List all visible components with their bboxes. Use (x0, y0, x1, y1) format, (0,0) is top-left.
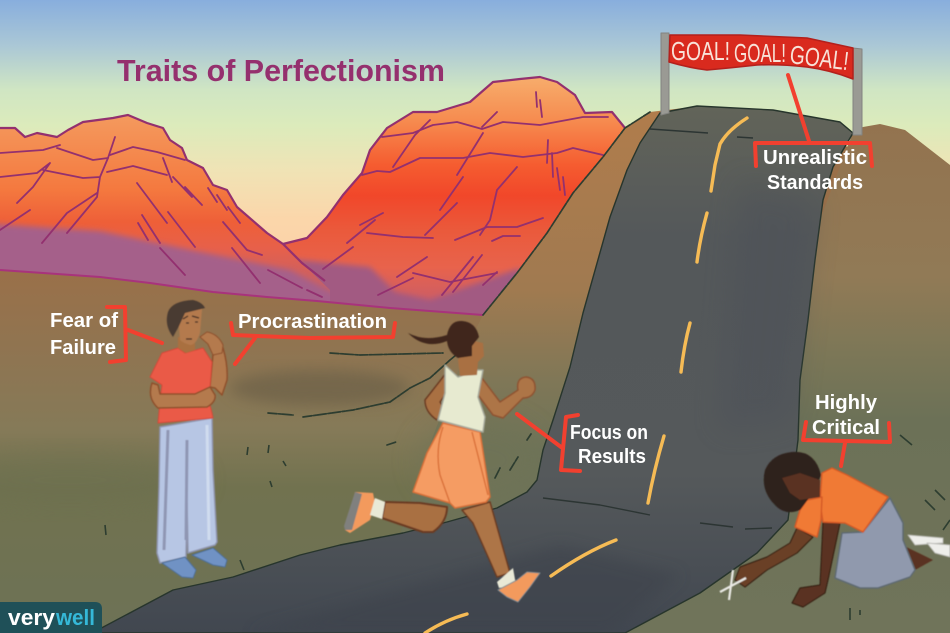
banner text: GOAL! (671, 36, 730, 66)
trousers (835, 498, 915, 588)
trousers (157, 418, 217, 563)
back arm (425, 372, 452, 420)
banner posts (661, 33, 669, 115)
front leg (462, 502, 510, 577)
scissors (720, 570, 746, 600)
head and hair (764, 452, 821, 512)
back arm (792, 522, 840, 607)
ground shadow patches (0, 370, 540, 506)
crouching woman (720, 452, 950, 607)
road cracks (543, 129, 772, 529)
label: fear of failure: Failure (50, 337, 116, 359)
back leg and feet (898, 543, 933, 570)
label: highly critical: Critical (812, 417, 880, 439)
right hill (600, 124, 950, 633)
callout bracket (107, 307, 162, 362)
label: fear of failure (50, 307, 162, 362)
shoes (162, 557, 196, 578)
face (183, 316, 199, 339)
sky background (0, 0, 950, 320)
logo background (0, 602, 102, 633)
front arm (735, 528, 813, 587)
shirt (150, 348, 213, 423)
hair (167, 300, 205, 337)
back leg (382, 502, 447, 532)
label: focus on results: Focus on (570, 422, 648, 444)
front sock and shoe (497, 568, 516, 588)
ground grass tufts (105, 435, 950, 620)
back shoe (345, 492, 375, 533)
title: Traits of Perfectionism (117, 53, 445, 88)
raised arm (210, 348, 227, 395)
mountains (0, 77, 625, 320)
road (92, 106, 853, 633)
shorts (413, 423, 490, 508)
logo: verywell (0, 602, 102, 633)
top (438, 365, 485, 432)
road shade (250, 545, 680, 633)
label: focus on results (517, 414, 648, 471)
label: unrealistic standards: Standards (767, 172, 863, 194)
callout bracket (803, 422, 890, 466)
neck and face (458, 340, 484, 376)
grass hill left of road (400, 106, 700, 535)
front arm (478, 373, 535, 418)
man: procrastinating figure (150, 300, 227, 578)
hair and ponytail (408, 321, 479, 358)
label: highly critical: Highly (815, 392, 878, 414)
label: unrealistic standards (755, 75, 872, 194)
callout bracket (755, 75, 872, 166)
right mountain (280, 77, 625, 320)
goal banner (661, 33, 862, 135)
runner figure (344, 321, 540, 602)
crossed arm (150, 383, 215, 408)
banner text (671, 36, 850, 76)
logo: verywell: well (55, 605, 95, 630)
hand on chin (200, 332, 223, 355)
banner text: GOAL! (734, 38, 786, 68)
label: procrastination (231, 311, 395, 364)
label: highly critical (803, 392, 890, 466)
callout bracket (517, 414, 580, 471)
road centre line dashes (425, 118, 747, 633)
label: procrastination: Procrastination (238, 311, 387, 333)
callout bracket (231, 323, 395, 364)
label: unrealistic standards: Unrealistic (763, 147, 867, 169)
hill grass lines (268, 112, 650, 478)
banner flag (669, 35, 853, 79)
left mountain (0, 114, 330, 298)
label: focus on results: Results (578, 446, 646, 468)
shirt (820, 468, 888, 532)
label: fear of failure: Fear of (50, 310, 118, 332)
banner text: GOAL! (788, 39, 850, 76)
neck and head (178, 337, 195, 353)
logo: verywell: very (8, 605, 56, 630)
